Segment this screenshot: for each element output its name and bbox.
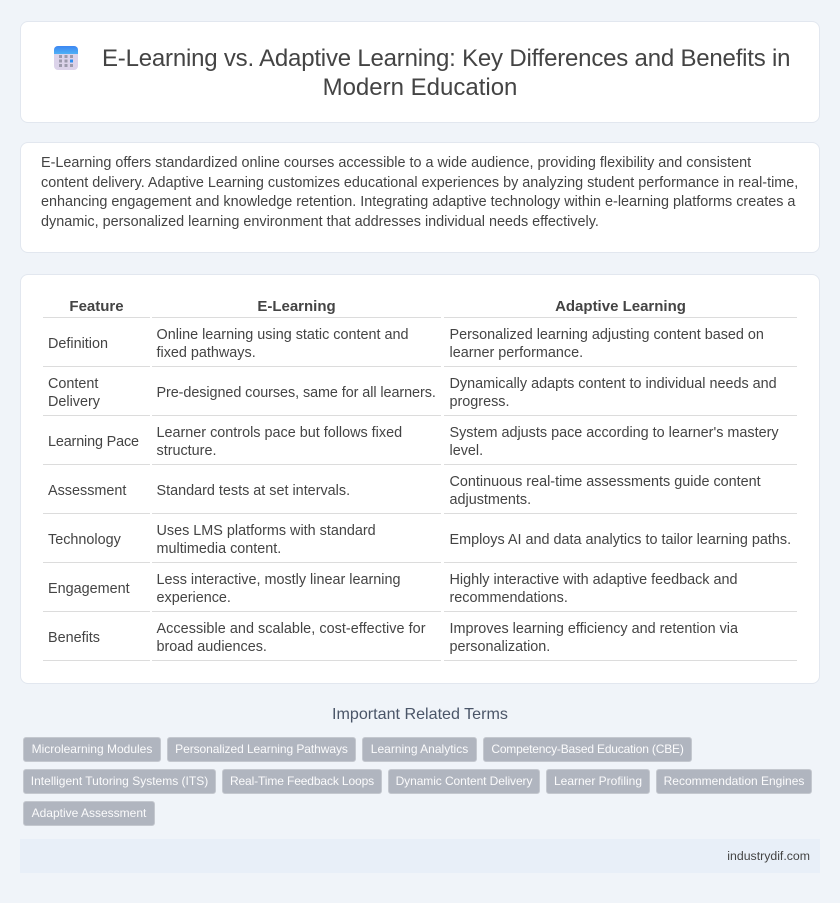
row: Engagement: [48, 572, 737, 606]
row: Definition: Online learning using static content and: [156, 327, 408, 343]
title: Modern Education: [323, 74, 517, 101]
related terms tags: Microlearning Modules: [32, 742, 152, 756]
row: Benefits: personalization.: [450, 639, 550, 655]
row: Technology: multimedia content.: [156, 541, 281, 557]
row: Learning Pace: level.: [450, 443, 483, 459]
row: Engagement: recommendations.: [450, 590, 568, 606]
row: Learning Pace: structure.: [156, 443, 216, 459]
row: Engagement: Engagement: [48, 581, 130, 597]
related terms tags: Personalized Learning Pathways: [175, 742, 348, 756]
row: Benefits: broad audiences.: [156, 639, 267, 655]
related terms tags: Learner Profiling: [554, 774, 642, 788]
row: Content Delivery: Delivery: [48, 394, 100, 410]
row: Benefits: Accessible and scalable, cost-effective for: [156, 621, 426, 637]
row: Learning Pace: Learning Pace: [48, 434, 139, 450]
row: Benefits: Improves learning efficiency and retention via: [450, 621, 738, 637]
intro paragraph: enhancing engagement and knowledge retention. Integrating adaptive technology within e-learning platforms creates a: [41, 194, 795, 210]
row: Definition: Personalized learning adjusting content based on: [450, 327, 764, 343]
row: Content Delivery: Dynamically adapts content to individual needs and: [450, 376, 777, 392]
row: Assessment: [48, 474, 761, 508]
row: Benefits: Benefits: [48, 630, 100, 646]
icon: calendar: [54, 46, 78, 70]
related terms tags: Recommendation Engines: [664, 774, 804, 788]
intro paragraph: content delivery. Adaptive Learning customizes educational experiences by analyzing student performance in real-time,: [41, 174, 798, 190]
footer bar: [20, 839, 820, 873]
comparison table panel: [20, 274, 820, 684]
intro paragraph: dynamic, personalized learning environment that addresses individual needs effectively.: [41, 214, 599, 230]
row: Learning Pace: [48, 425, 779, 459]
row: Assessment: adjustments.: [450, 492, 531, 508]
table header: E-Learning: [257, 298, 336, 315]
row: Definition: learner performance.: [450, 345, 583, 361]
row: Technology: Employs AI and data analytics to tailor learning paths.: [450, 532, 791, 548]
intro paragraph: E-Learning offers standardized online courses accessible to a wide audience, providing flexibility and consistent: [41, 155, 751, 171]
related terms tags: Dynamic Content Delivery: [396, 774, 532, 788]
row: Definition: Definition: [48, 336, 108, 352]
comparison table: [43, 298, 797, 661]
related terms tags: [23, 737, 812, 826]
row: Learning Pace: System adjusts pace according to learner's mastery: [450, 425, 779, 441]
footer text: industrydif.com: [727, 849, 810, 863]
title card: [20, 21, 820, 123]
row: Assessment: Assessment: [48, 483, 126, 499]
row: Engagement: Highly interactive with adaptive feedback and: [450, 572, 737, 588]
row: Technology: Technology: [48, 532, 121, 548]
row: Engagement: experience.: [156, 590, 231, 606]
table header: Feature: [69, 298, 124, 315]
title: [102, 45, 790, 101]
row: Definition: [48, 327, 764, 361]
row: Technology: Uses LMS platforms with standard: [156, 523, 376, 539]
row: Benefits: [48, 621, 738, 655]
related terms tags: Adaptive Assessment: [32, 806, 146, 820]
related terms tags: Intelligent Tutoring Systems (ITS): [31, 774, 208, 788]
intro card: [20, 142, 820, 253]
row: Content Delivery: Pre-designed courses, same for all learners.: [156, 385, 436, 401]
row: Learning Pace: Learner controls pace but follows fixed: [156, 425, 402, 441]
table header: Adaptive Learning: [555, 298, 686, 315]
related terms tags: Learning Analytics: [371, 742, 468, 756]
table header: [69, 298, 686, 315]
row: Assessment: Standard tests at set intervals.: [156, 483, 350, 499]
related terms heading: Important Related Terms: [332, 705, 508, 723]
related terms tags: Competency-Based Education (CBE): [491, 742, 684, 756]
row: Definition: fixed pathways.: [156, 345, 256, 361]
row: Engagement: Less interactive, mostly linear learning: [156, 572, 400, 588]
row: Content Delivery: [48, 376, 777, 410]
related terms tags: Real-Time Feedback Loops: [230, 774, 374, 788]
row: Assessment: Continuous real-time assessments guide content: [450, 474, 761, 490]
title: E-Learning vs. Adaptive Learning: Key Differences and Benefits in: [102, 45, 790, 72]
row: Technology: [48, 523, 791, 557]
row: Content Delivery: progress.: [450, 394, 510, 410]
intro paragraph: [41, 155, 798, 230]
row: Content Delivery: Content: [48, 376, 98, 392]
